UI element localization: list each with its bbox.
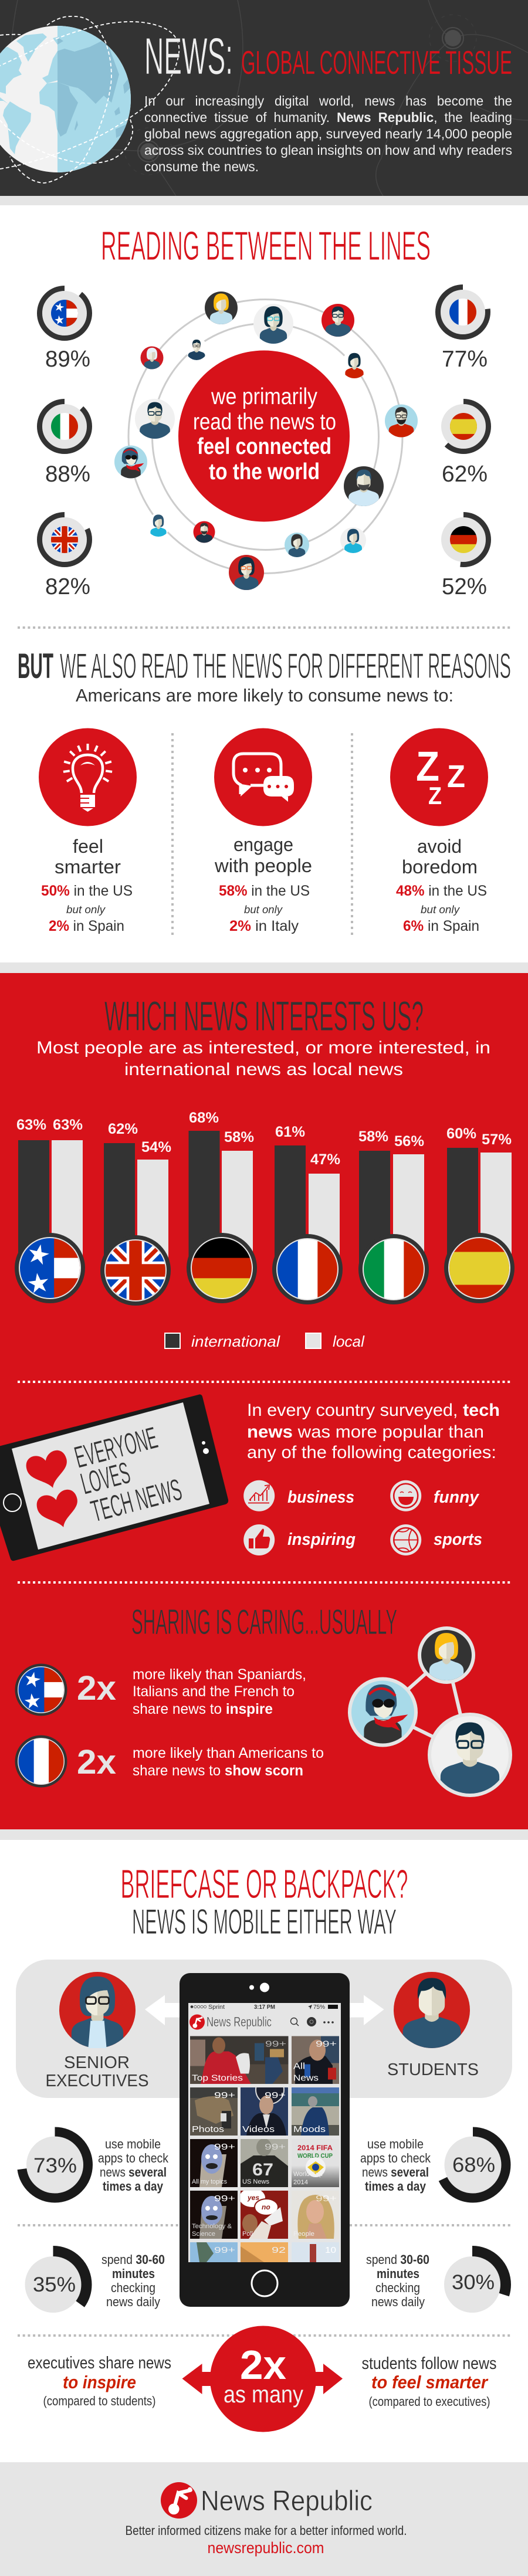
column: feel smarter: 2% in Spain xyxy=(49,918,124,934)
label: students: STUDENTS xyxy=(387,2060,479,2079)
icon: tilted phone: EVERYONE xyxy=(71,1421,161,1475)
heading: which news interests us xyxy=(36,994,490,1079)
arrow: left xyxy=(145,1995,188,2025)
intro text: across six countries to glean insights on how and why readers xyxy=(144,143,512,158)
donut: UK 82% xyxy=(40,515,90,599)
icon: sleeping Z: Z xyxy=(416,744,439,790)
heading: briefcase or backpack xyxy=(121,1861,408,1941)
center circle: primary reason: read the news to xyxy=(193,409,336,435)
tile: all news: News xyxy=(293,2073,319,2083)
bars: Spain xyxy=(444,1126,515,1303)
column: feel smarter: feel xyxy=(73,836,103,857)
category: sports: sports xyxy=(434,1530,482,1549)
text: students follow: (compared to executives) xyxy=(368,2394,490,2409)
avatar: senior executive xyxy=(59,1972,136,2048)
icon: sleeping Z: Z xyxy=(447,759,465,794)
bars: France xyxy=(272,1124,343,1304)
tile: all news: All xyxy=(293,2061,305,2072)
donut: UK 82%: 82% xyxy=(45,574,90,599)
stat: USA 2x: more likely than Spaniards, xyxy=(133,1666,306,1683)
center circle: primary reason: feel connected xyxy=(197,434,331,459)
text: executives share: to inspire xyxy=(63,2372,136,2392)
icon: smartphone with app xyxy=(180,1973,350,2307)
stat: France 2x xyxy=(15,1735,324,1788)
intro text: consume the news. xyxy=(144,159,259,174)
bars: UK: 54% xyxy=(141,1139,171,1155)
donut: Spain 62%: 62% xyxy=(442,462,488,487)
stat: executives 73%: times a day xyxy=(103,2179,164,2194)
column: feel smarter: smarter xyxy=(55,856,121,877)
avatar ring xyxy=(114,292,418,590)
tile: US news: US News xyxy=(242,2178,270,2185)
panel: audience comparison xyxy=(16,1960,512,2098)
stat: executives 35%: checking xyxy=(111,2280,155,2295)
panel: footer xyxy=(0,2462,528,2576)
tile row: partial tiles: 92 xyxy=(272,2245,286,2255)
text: tech news: news was more popular than xyxy=(247,1422,484,1442)
legend: local xyxy=(333,1333,365,1350)
tile: videos: Videos xyxy=(242,2124,275,2134)
tile: photos: 99+ xyxy=(214,2090,235,2100)
column: feel smarter: 50% in the US xyxy=(41,883,133,899)
tile: all my topics: All my topics xyxy=(192,2178,227,2185)
tagline: Better informed citizens make for a better informed world. xyxy=(126,2523,407,2538)
icon: sleeping Z: Z xyxy=(428,782,442,809)
app bar xyxy=(189,2014,334,2029)
icon: news republic logo xyxy=(161,2482,197,2519)
tile row: partial tiles xyxy=(190,2242,339,2262)
tile: videos: 99+ xyxy=(265,2090,286,2100)
tile: moods xyxy=(292,2087,339,2136)
stat: students 30%: news daily xyxy=(371,2294,425,2309)
stat: students 68%: times a day xyxy=(365,2179,427,2194)
donut: USA 89%: 89% xyxy=(45,347,90,372)
text: executives share xyxy=(28,2354,171,2408)
bars: USA: 63% xyxy=(16,1117,46,1133)
stat: France 2x: more likely than Americans to xyxy=(133,1745,324,1761)
text: executives share: (compared to students) xyxy=(43,2394,156,2408)
text: tech news xyxy=(247,1401,500,1462)
heading: different reasons: Americans are more likely to consume news to: xyxy=(76,685,453,706)
tile row: partial tiles: 99+ xyxy=(214,2245,235,2255)
column: engage with people: engage xyxy=(233,834,293,855)
column: avoid boredom: but only xyxy=(421,904,460,916)
bars: Germany xyxy=(187,1110,257,1303)
donut: Germany 52%: 52% xyxy=(442,574,487,599)
status bar xyxy=(191,2004,338,2011)
text: tech news: any of the following categories: xyxy=(247,1443,496,1462)
column: avoid boredom: 48% in the US xyxy=(396,883,487,899)
text: tech news: In every country surveyed, tech xyxy=(247,1401,500,1420)
tile: top stories: 99+ xyxy=(265,2039,286,2049)
tile: US news xyxy=(241,2139,288,2187)
bars: Spain: 60% xyxy=(446,1126,476,1142)
stat: executives 35%: 35% xyxy=(33,2273,76,2296)
tile: photos xyxy=(190,2087,238,2136)
tile: poll: Poll xyxy=(242,2231,253,2238)
stat: executives 73%: 73% xyxy=(33,2154,77,2177)
stat: USA 2x xyxy=(15,1663,306,1717)
app screen xyxy=(188,2003,341,2262)
tile: poll: yes xyxy=(247,2194,259,2202)
tile: world cup: WORLD CUP xyxy=(297,2153,333,2160)
center circle: primary reason: to the world xyxy=(209,459,320,484)
stat: executives 73%: news several xyxy=(100,2165,167,2180)
bars: France: 61% xyxy=(275,1124,305,1140)
title: NEWS: xyxy=(144,27,233,85)
diagram: connected people rings xyxy=(114,292,418,590)
wordmark: News Republic xyxy=(201,2486,373,2517)
bars: Spain: 57% xyxy=(482,1131,512,1148)
tile: all news xyxy=(292,2036,339,2084)
heading: different reasons xyxy=(18,646,511,706)
tile: moods: Moods xyxy=(293,2124,326,2134)
donut: USA 89% xyxy=(40,289,90,372)
stat: USA 2x: share news to inspire xyxy=(133,1701,273,1717)
stat: students 68% xyxy=(360,2131,506,2198)
bars: Germany: 68% xyxy=(189,1110,219,1126)
callout: 2x as many: as many xyxy=(224,2381,303,2408)
bars: Italy: 56% xyxy=(394,1133,424,1150)
legend: international xyxy=(191,1333,280,1350)
legend xyxy=(165,1333,365,1350)
donut: Spain 62% xyxy=(439,401,488,487)
category: inspiring: inspiring xyxy=(287,1530,356,1549)
column: avoid boredom xyxy=(390,728,488,934)
column: engage with people: 2% in Italy xyxy=(229,918,299,934)
tile: people: People xyxy=(293,2231,314,2238)
bars: France: 47% xyxy=(310,1151,340,1168)
stat: executives 35% xyxy=(20,2251,165,2318)
category: funny: funny xyxy=(434,1488,480,1507)
tile: technology and science: Science xyxy=(192,2231,215,2238)
tile: all my topics: 99+ xyxy=(214,2142,235,2152)
icon: tilted phone: TECH NEWS xyxy=(87,1473,185,1529)
tile row: partial tiles: 10 xyxy=(325,2245,336,2255)
stat: executives 35%: minutes xyxy=(112,2266,155,2281)
tile: top stories xyxy=(190,2036,289,2084)
column: feel smarter: but only xyxy=(66,904,106,916)
tile: world cup: 2014 FIFA xyxy=(297,2144,333,2152)
donut: Italy 88%: 88% xyxy=(45,462,90,487)
heading: which news interests us: Most people are as interested, or more interested, in xyxy=(36,1038,490,1057)
arrow: right xyxy=(340,1995,384,2025)
stat: executives 73% xyxy=(22,2131,169,2198)
stat: France 2x: share news to show scorn xyxy=(133,1762,303,1779)
icon: hearts xyxy=(24,1448,83,1533)
intro text xyxy=(144,93,512,174)
stat: students 30%: minutes xyxy=(377,2266,419,2281)
tile: photos: Photos xyxy=(192,2124,224,2134)
callout: 2x as many: 2x xyxy=(240,2342,286,2388)
tile: technology and science: Technology & xyxy=(192,2223,232,2230)
avatar: student xyxy=(394,1972,470,2048)
donut: France 77%: 77% xyxy=(442,347,488,372)
donut: Italy 88% xyxy=(40,401,90,487)
column: engage with people: with people xyxy=(214,855,312,876)
bars: Germany: 58% xyxy=(224,1129,254,1145)
icon: chat bubbles xyxy=(214,728,312,826)
heading: which news interests us: international news as local news xyxy=(124,1060,403,1079)
tile: top stories: Top Stories xyxy=(192,2073,243,2083)
diagram: sharing network xyxy=(348,1626,512,1797)
intro text: In our increasingly digital world, news has become the xyxy=(144,93,512,109)
stat: students 68%: 68% xyxy=(452,2154,495,2177)
callout: 2x as many xyxy=(182,2326,343,2432)
heading: different reasons: BUT xyxy=(18,646,53,686)
column: avoid boredom: 6% in Spain xyxy=(403,918,479,934)
stat: students 68%: use mobile xyxy=(367,2137,424,2151)
status bar: 3:17 PM xyxy=(254,2004,275,2011)
stat: students 30%: spend 30-60 xyxy=(366,2252,429,2267)
column: engage with people: but only xyxy=(244,904,283,916)
center circle: primary reason: we primarily xyxy=(211,384,317,409)
website: newsrepublic.com xyxy=(208,2539,324,2557)
tile: world cup: 2014 xyxy=(293,2179,308,2186)
status bar: Sprint xyxy=(208,2004,225,2011)
stat: France 2x: 2x xyxy=(77,1743,116,1781)
tile: videos xyxy=(241,2087,288,2136)
bars: UK xyxy=(100,1121,171,1306)
tile: US news: 67 xyxy=(252,2160,273,2180)
bars: USA: 63% xyxy=(53,1117,83,1133)
intro text: global news aggregation app, surveyed nearly 14,000 people xyxy=(144,126,512,141)
stat: students 68%: news several xyxy=(362,2165,429,2180)
label: senior executives: EXECUTIVES xyxy=(46,2072,149,2090)
title xyxy=(144,27,512,85)
label: senior executives: SENIOR xyxy=(64,2053,130,2072)
tile: world cup: World Cup xyxy=(293,2171,323,2178)
stat: executives 35%: news daily xyxy=(106,2294,160,2309)
donut: France 77% xyxy=(438,287,488,372)
tile: poll xyxy=(241,2191,288,2239)
column: avoid boredom: boredom xyxy=(402,856,478,877)
category: business xyxy=(243,1480,354,1511)
icon: tilted phone xyxy=(0,1394,228,1561)
tile: technology and science xyxy=(190,2191,238,2239)
icon: globe xyxy=(0,16,179,183)
tile: technology and science: 99+ xyxy=(214,2194,235,2204)
network node xyxy=(125,15,476,175)
bar chart: interest by country xyxy=(15,1110,515,1306)
icon: tilted phone: LOVES xyxy=(77,1456,134,1501)
panel: header xyxy=(0,0,528,196)
column: engage with people: 58% in the US xyxy=(219,883,310,899)
stat: executives 35%: spend 30-60 xyxy=(101,2252,165,2267)
category: inspiring xyxy=(243,1524,356,1555)
donut: Germany 52% xyxy=(439,515,488,599)
tile: poll: no xyxy=(262,2203,270,2211)
tile: all news: 99+ xyxy=(316,2039,337,2049)
category: business: business xyxy=(287,1488,354,1507)
bars: USA xyxy=(15,1117,85,1303)
stat: students 68%: apps to check xyxy=(360,2151,431,2165)
column: engage with people xyxy=(214,728,312,934)
icon: sleeping Z xyxy=(390,728,488,826)
column: feel smarter xyxy=(39,728,137,934)
center circle: primary reason xyxy=(178,351,350,522)
bars: Italy: 58% xyxy=(358,1128,388,1145)
stat: students 30% xyxy=(366,2251,506,2318)
text: students follow: to feel smarter xyxy=(371,2372,489,2392)
tile: US news: 99+ xyxy=(265,2142,286,2152)
tile: world cup xyxy=(292,2144,339,2187)
text: executives share: executives share news xyxy=(28,2354,171,2372)
stat: executives 73%: use mobile xyxy=(105,2137,161,2151)
app bar: News Republic xyxy=(207,2014,272,2029)
category: funny xyxy=(390,1480,480,1511)
stat: executives 73%: apps to check xyxy=(98,2151,169,2165)
intro text: connective tissue of humanity. News Republic, the leading xyxy=(144,110,512,125)
panel: red section xyxy=(0,973,528,1829)
icon: light bulb xyxy=(39,728,137,826)
bars: Italy xyxy=(358,1128,429,1304)
stat: USA 2x: 2x xyxy=(77,1669,116,1707)
stat: students 30%: 30% xyxy=(452,2271,495,2294)
tile: all my topics xyxy=(190,2139,238,2187)
column: avoid boredom: avoid xyxy=(417,836,462,857)
panel: country donuts xyxy=(40,287,488,599)
text: students follow xyxy=(361,2354,496,2409)
stat: USA 2x: Italians and the French to xyxy=(133,1683,295,1700)
category: sports xyxy=(390,1524,482,1555)
label: senior executives xyxy=(46,2053,149,2090)
stat: students 30%: checking xyxy=(375,2280,420,2295)
tile: people: 99+ xyxy=(316,2194,337,2204)
tile: people xyxy=(293,2194,337,2239)
status bar: 75% xyxy=(313,2004,325,2011)
text: students follow: students follow news xyxy=(361,2354,496,2373)
bars: UK: 62% xyxy=(108,1121,138,1137)
